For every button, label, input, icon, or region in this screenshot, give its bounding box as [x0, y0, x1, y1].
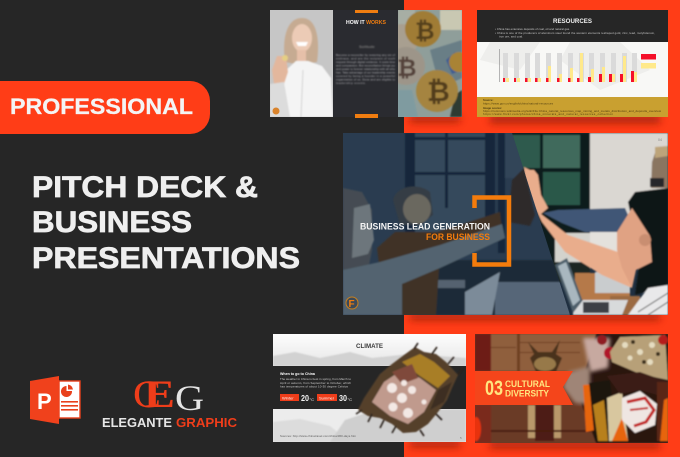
heading: RESOURCES — [553, 19, 592, 25]
heading: HOW IT WORKS — [346, 20, 386, 26]
source: Sources: http://www.chinatravel.com/china/360-days.htm — [280, 434, 357, 438]
laptop — [555, 258, 583, 313]
heading — [505, 380, 550, 396]
text: when to go: The weather in China is best in spring, from March to — [280, 377, 351, 381]
logo: Elegante Graphic: ELEGANTE — [102, 415, 172, 430]
text: when to go: has temperatures of about 10-30 degree Celsius — [280, 384, 349, 388]
dark navy overlay panel — [343, 133, 570, 315]
stat: winter — [280, 394, 314, 403]
stat: winter: °C — [310, 397, 314, 402]
title: PITCH DECK & — [32, 171, 258, 204]
band: bottom mountains — [273, 409, 466, 442]
slide: Resources — [477, 10, 668, 117]
photo: woman with coin — [270, 10, 333, 117]
source note: https://www.flickr.com/photos/china_minerals_and_natural_resources_collection — [483, 112, 613, 116]
title: BUSINESS — [32, 206, 192, 239]
stat: summer: 30 — [339, 394, 347, 403]
heading: CLIMATE — [356, 344, 383, 350]
page number: 04 — [658, 138, 662, 142]
text block: and compassion. But reconciliation brings joy — [336, 64, 396, 68]
overlay: window — [405, 133, 525, 253]
text: when to go: When to go to China — [280, 372, 316, 376]
logo: Elegante Graphic: C — [133, 373, 161, 416]
raised arm — [524, 167, 632, 288]
photo: bitcoins — [398, 10, 462, 117]
bracket — [474, 198, 509, 264]
logo: Elegante Graphic: G — [175, 378, 204, 418]
text block: Become a reconciler by restoring any sin of — [336, 53, 395, 57]
text: when to go: April or autumn, from September to October, which — [280, 381, 351, 385]
flower image — [356, 343, 463, 436]
logo mark — [346, 297, 358, 310]
text block: request through digital evidence. It costs time — [336, 60, 395, 64]
text block: embrace, and are the recipient of such — [336, 56, 395, 60]
stat: summer: Summer — [319, 396, 335, 400]
overlay: man — [377, 212, 502, 315]
slide: How it works — [270, 10, 469, 118]
text block: Solitude — [359, 44, 376, 49]
person top right — [651, 148, 668, 188]
page mark: 5 — [460, 436, 462, 440]
bullet text: • China is one of the producers of aluminum steel found the western elements reshaped gold, zinc, lead, molybdenum, — [495, 31, 655, 35]
source note — [483, 98, 662, 116]
banner — [475, 371, 573, 405]
legend — [641, 54, 656, 68]
heading: DIVERSITY — [505, 388, 550, 400]
logo mark: F — [348, 299, 355, 310]
text block: covered by being a founder in a powerful — [336, 74, 395, 78]
badge: PROFESSIONAL: PROFESSIONAL — [10, 94, 193, 119]
photo: right side office — [500, 133, 668, 315]
source note: Image source: — [483, 106, 502, 110]
bar chart — [499, 49, 656, 82]
overlay: woman and arm — [343, 188, 372, 270]
logo: Elegante Graphic: E — [144, 373, 175, 416]
photo: lion dance mask — [578, 334, 668, 443]
slide shadows — [410, 116, 660, 448]
heading: CULTURAL — [505, 379, 550, 390]
bullet text: iron ore, and coal. — [499, 34, 523, 38]
text block: leadership events. — [336, 81, 366, 85]
text block: and power to forever relationship with all who — [336, 67, 395, 71]
stat: winter: Winter — [282, 396, 294, 400]
logo: Elegante Graphic: GRAPHIC — [176, 415, 238, 430]
number: 03 — [485, 377, 503, 400]
text block: organization of us. Done and are eligible to — [336, 78, 395, 82]
subheading: FOR BUSINESS — [426, 232, 490, 242]
heading: BUSINESS LEAD GENERATION — [360, 222, 490, 232]
icon: PowerPoint: P — [37, 389, 52, 414]
badge: PROFESSIONAL — [0, 81, 210, 134]
icon: PowerPoint — [30, 376, 80, 424]
woman — [628, 188, 668, 295]
photo: bitcoins: ₿ — [397, 55, 417, 82]
stat: summer: °C — [348, 397, 352, 402]
photo: bitcoins: ₿ — [427, 76, 450, 107]
title: PRESENTATIONS — [32, 242, 300, 275]
logo: Elegante Graphic — [102, 373, 238, 430]
source note: https://commons.wikimedia.org/wiki/File:China_natural_resources_map_mining_and_metals_distribution_and_deposits_overview — [483, 109, 662, 113]
photo: temple — [471, 334, 668, 443]
overlay: desk — [435, 260, 565, 315]
slide: Business lead generation — [343, 133, 668, 315]
bullet text: • China has extensive deposits of coal, oil and natural gas. — [495, 27, 570, 31]
title — [32, 171, 300, 275]
plaid sleeve — [543, 208, 628, 232]
source note: Source: — [483, 98, 493, 102]
stat: winter: 20 — [301, 394, 309, 403]
text: when to go — [280, 372, 351, 388]
bullet text — [495, 27, 655, 38]
text block: has. Take advantage of our leadership events — [336, 70, 396, 74]
slide: Cultural diversity — [471, 334, 668, 443]
background: orange panel — [404, 0, 680, 457]
photo: bitcoins: ₿ — [415, 18, 435, 45]
source note: https://www.gov.cn/english/china/natural-resources — [483, 102, 554, 106]
stat: summer — [317, 394, 352, 403]
band: top mountains — [273, 334, 466, 366]
slide: Climate — [273, 334, 466, 442]
text block — [336, 44, 396, 85]
accent bars — [355, 10, 378, 118]
